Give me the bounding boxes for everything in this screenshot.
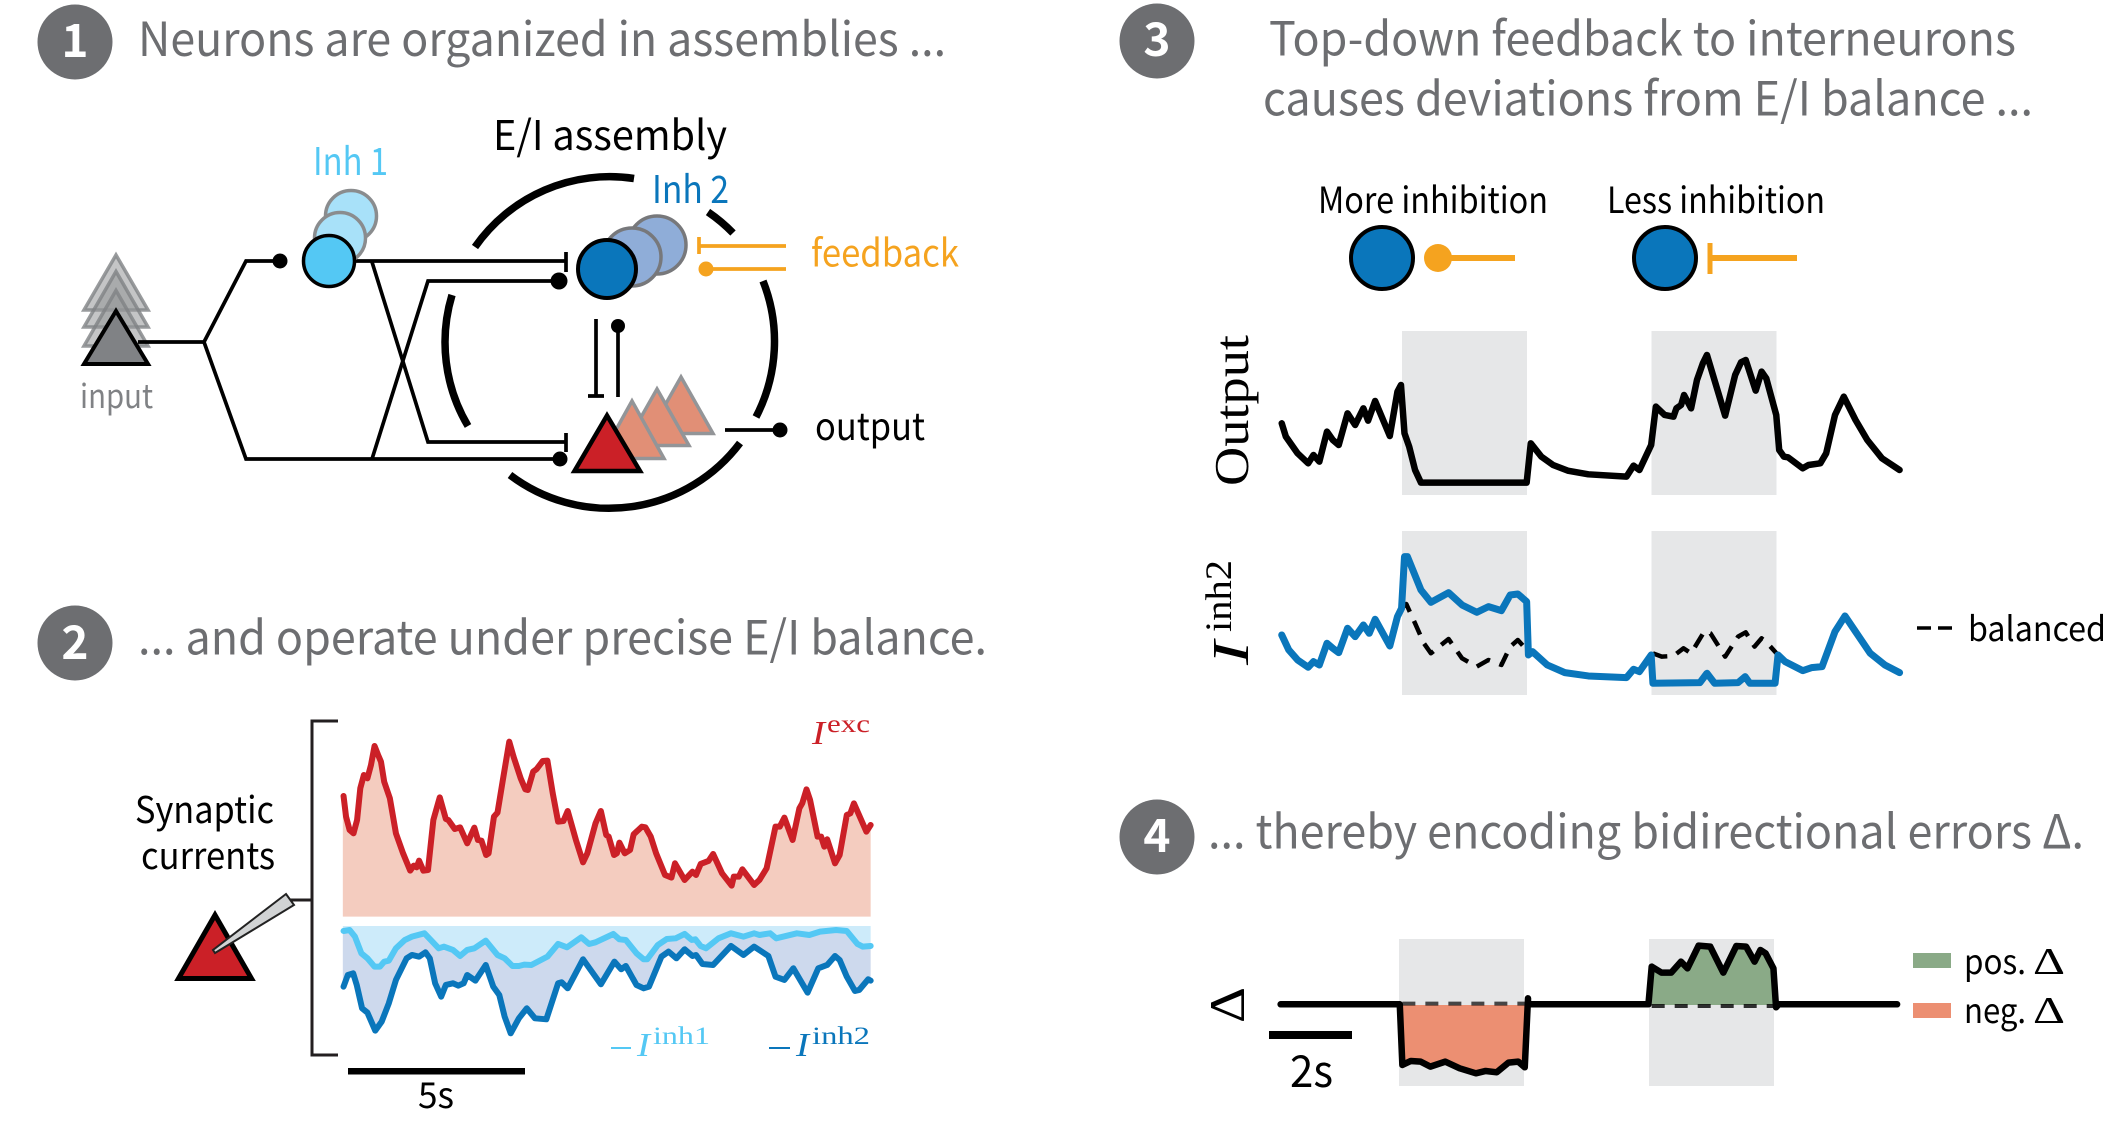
heading 3: [1263, 0, 2033, 130]
I inh2 axis label: [1199, 560, 1260, 666]
synaptic currents label: Synaptic: [135, 780, 274, 834]
scale bar 2s: 2s: [1290, 1036, 1333, 1100]
I inh2 label: [769, 1023, 870, 1064]
icon: less inhibition synapse: [1634, 227, 1797, 289]
output axis label: Output: [1204, 335, 1259, 486]
excitatory neurons: [574, 377, 713, 471]
Inh 2 label: Inh 2: [652, 159, 729, 214]
heading 2: ... and operate under precise E/I balance.: [138, 600, 987, 668]
recorded neuron with pipette: [178, 894, 294, 978]
synaptic current traces: [343, 742, 871, 1033]
badge 2: 2: [61, 607, 89, 673]
less inhibition label: Less inhibition: [1607, 172, 1825, 224]
output and inhibition traces: [1282, 355, 1900, 683]
legend: positive: Δ: [2033, 941, 2065, 983]
I inh1 label: I: [636, 1027, 652, 1064]
I inh1 label: [611, 1023, 710, 1064]
more inhibition label: More inhibition: [1318, 172, 1548, 224]
panel 1: neurons organized in assemblies: [38, 1, 959, 508]
Inh 1 label: Inh 1: [313, 131, 388, 186]
gray condition windows: [1402, 331, 1776, 695]
input label: input: [80, 370, 153, 418]
badge 1: 1: [61, 5, 89, 71]
assembly label: E/I assembly: [493, 102, 727, 162]
heading 3: Top-down feedback to interneurons: [1269, 0, 2016, 70]
badge 3: [1120, 4, 1194, 78]
delta axis label: Δ: [1199, 987, 1255, 1023]
balanced legend: balanced: [1968, 602, 2106, 651]
wiring: [138, 252, 568, 466]
panel 4: bidirectional errors: [1120, 794, 2084, 1100]
badge 2: [38, 606, 112, 680]
I inh2 label: inh2: [812, 1023, 870, 1050]
panel 2: E/I balance: [38, 600, 987, 1119]
output label: output: [815, 396, 925, 451]
feedback synapses: [698, 237, 786, 276]
error trace: [1281, 946, 1897, 1073]
heading 1: Neurons are organized in assemblies ...: [138, 1, 946, 70]
panel 3: top-down feedback: [1120, 0, 2106, 695]
local inhibitory and excitatory connections: [588, 319, 625, 397]
assembly ring arcs: [445, 177, 775, 508]
legend: positive: pos.: [1964, 935, 2026, 984]
scale bar 2s: [1269, 1031, 1352, 1100]
badge 4: 4: [1143, 800, 1171, 866]
heading 4: ... thereby encoding bidirectional errors Δ.: [1208, 794, 2084, 862]
Inh 1 neurons: [304, 190, 376, 286]
legend: negative: Δ: [2033, 990, 2065, 1032]
legend: positive: [1913, 935, 2065, 984]
scale bar 5s: 5s: [418, 1067, 454, 1119]
input neurons: [84, 255, 148, 364]
badge 1: [38, 4, 112, 80]
bracket: [290, 721, 338, 1055]
feedback label: feedback: [811, 222, 959, 278]
output synapse: [725, 422, 788, 438]
gray condition windows: [1399, 939, 1774, 1086]
synaptic currents label: currents: [141, 826, 275, 880]
I inh2 axis label: inh2: [1199, 560, 1240, 632]
I inh2 label: I: [795, 1027, 811, 1064]
legend: negative: [1913, 984, 2065, 1033]
I inh1 label: inh1: [653, 1023, 710, 1050]
I exc label: [811, 711, 870, 752]
legend: negative: neg.: [1964, 984, 2026, 1033]
I inh2 axis label: I: [1203, 637, 1260, 666]
I exc label: I: [811, 715, 827, 752]
synaptic currents label: [135, 780, 275, 880]
I exc label: exc: [827, 711, 870, 738]
heading 3: causes deviations from E/I balance ...: [1263, 60, 2033, 130]
badge 3: 3: [1143, 4, 1171, 70]
icon: more inhibition synapse: [1351, 227, 1515, 289]
scale bar 5s: [348, 1067, 525, 1119]
Inh 2 neurons: [578, 216, 686, 298]
badge 4: [1120, 800, 1194, 874]
